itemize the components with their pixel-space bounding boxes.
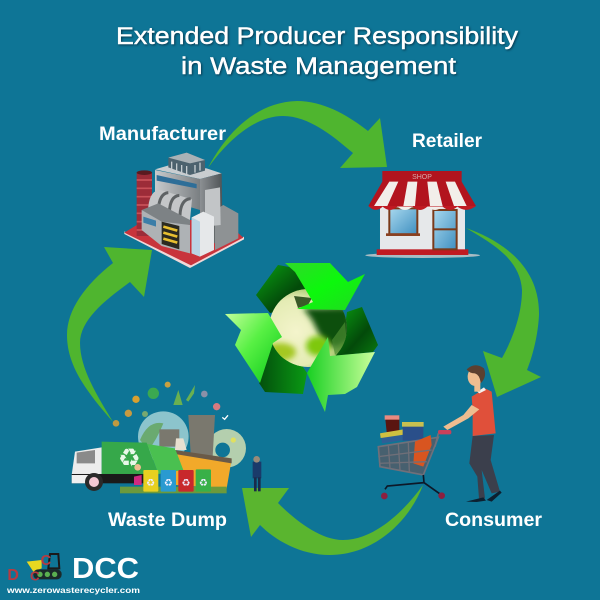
floating recyclables bbox=[113, 382, 236, 443]
label: consumer: Consumer bbox=[445, 510, 543, 531]
label: retailer: Retailer bbox=[412, 131, 483, 152]
recycling arrow: left bbox=[225, 313, 282, 383]
shop sign: SHOP bbox=[412, 174, 432, 181]
logo icon: loader: C bbox=[30, 569, 40, 584]
label: manufacturer: Manufacturer bbox=[99, 124, 227, 145]
arrow: retailer to consumer bbox=[466, 228, 541, 397]
logo icon: loader: C bbox=[41, 553, 52, 569]
recycling symbol on truck: ♻ bbox=[118, 443, 141, 473]
arrow: waste dump to manufacturer bbox=[67, 247, 152, 422]
cart bbox=[378, 415, 451, 499]
recycling arrow: top bbox=[285, 263, 365, 310]
logo icon: loader: D bbox=[7, 567, 19, 584]
arrow: manufacturer to retailer bbox=[208, 101, 387, 168]
recycling arrow: right bbox=[307, 337, 375, 412]
logo: DCC bbox=[6, 553, 140, 595]
icon: factory bbox=[124, 153, 244, 268]
icon: waste dump with garbage truck: ♻ bbox=[199, 478, 208, 489]
arrow: consumer to waste dump bbox=[242, 485, 423, 555]
title bbox=[116, 23, 519, 80]
icon: recycling symbol with globe bbox=[225, 263, 378, 412]
icon: waste dump with garbage truck: ♻ bbox=[164, 478, 173, 489]
title: Extended Producer Responsibility bbox=[116, 23, 519, 50]
icon: shop bbox=[365, 171, 480, 258]
icon: consumer with shopping cart bbox=[378, 365, 502, 502]
logo wordmark: DCC bbox=[72, 553, 139, 585]
logo icon: loader bbox=[7, 553, 62, 584]
label: waste dump: Waste Dump bbox=[108, 510, 227, 531]
recycling arrow tails: dark faces bbox=[256, 265, 378, 394]
logo url: www.zerowasterecycler.com bbox=[6, 586, 140, 595]
icon: waste dump with garbage truck: ♻ bbox=[182, 478, 191, 489]
person bbox=[443, 365, 502, 502]
globe bbox=[270, 289, 347, 367]
icon: waste dump with garbage truck: ♻ bbox=[146, 478, 155, 489]
icon: waste dump with garbage truck bbox=[72, 382, 261, 493]
title: in Waste Management bbox=[181, 53, 456, 80]
